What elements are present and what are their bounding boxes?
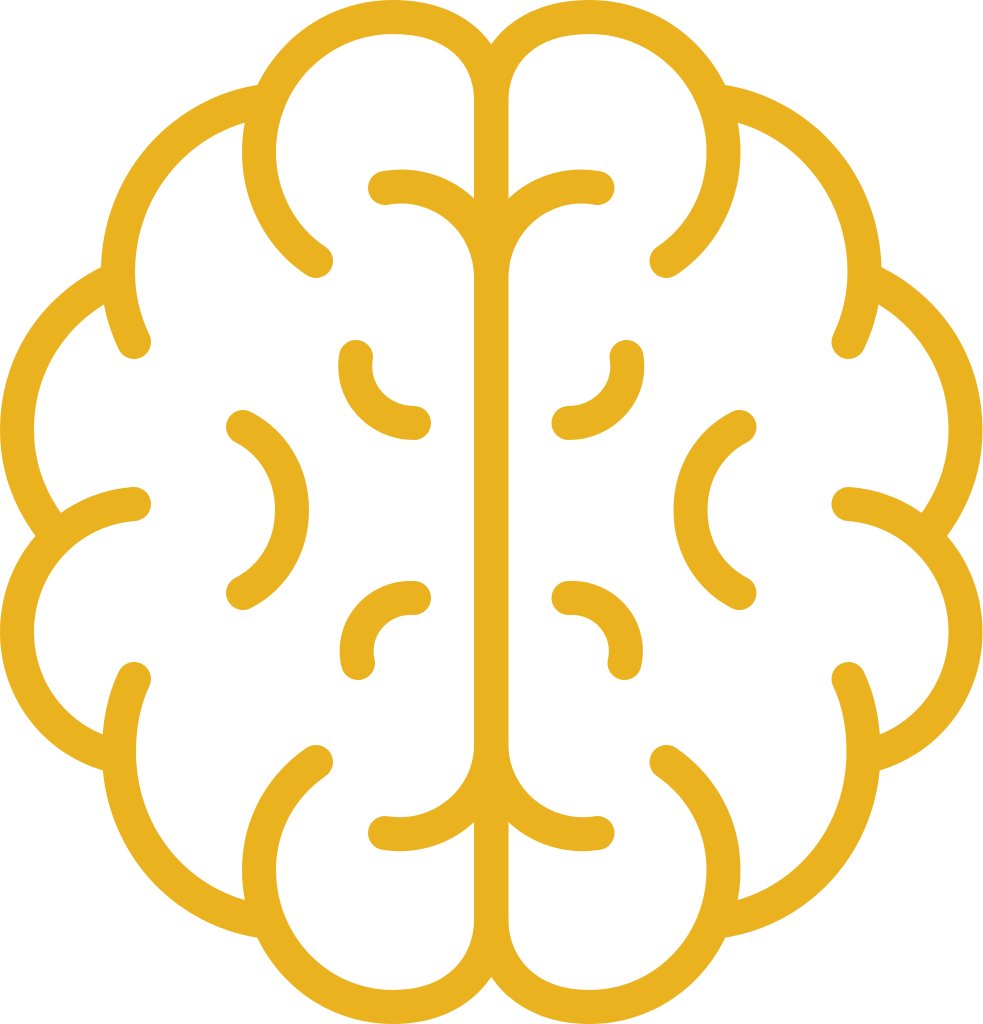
bottom lobe (259, 762, 491, 1007)
upper outer lobe (118, 101, 265, 342)
lower outer lobe (119, 679, 268, 922)
left upper lobe (17, 278, 118, 527)
upper inner fold (492, 187, 598, 278)
lower small fold (357, 598, 414, 663)
upper small fold (355, 357, 414, 423)
upper inner fold (385, 187, 491, 278)
top lobe (492, 17, 724, 261)
upper small fold (568, 357, 627, 423)
side arc fold (243, 427, 292, 593)
right hemisphere (492, 17, 966, 1007)
lower inner fold (492, 745, 598, 834)
lower small fold (568, 598, 626, 663)
bottom lobe (492, 762, 724, 1007)
right upper lobe (864, 278, 966, 527)
left lower lobe (17, 504, 134, 756)
right lower lobe (848, 504, 966, 756)
left hemisphere (17, 17, 491, 1007)
lower outer lobe (714, 679, 864, 922)
side arc fold (690, 427, 740, 593)
upper outer lobe (718, 101, 864, 342)
top lobe (259, 17, 491, 261)
central column (474, 100, 508, 920)
lower inner fold (385, 745, 491, 834)
